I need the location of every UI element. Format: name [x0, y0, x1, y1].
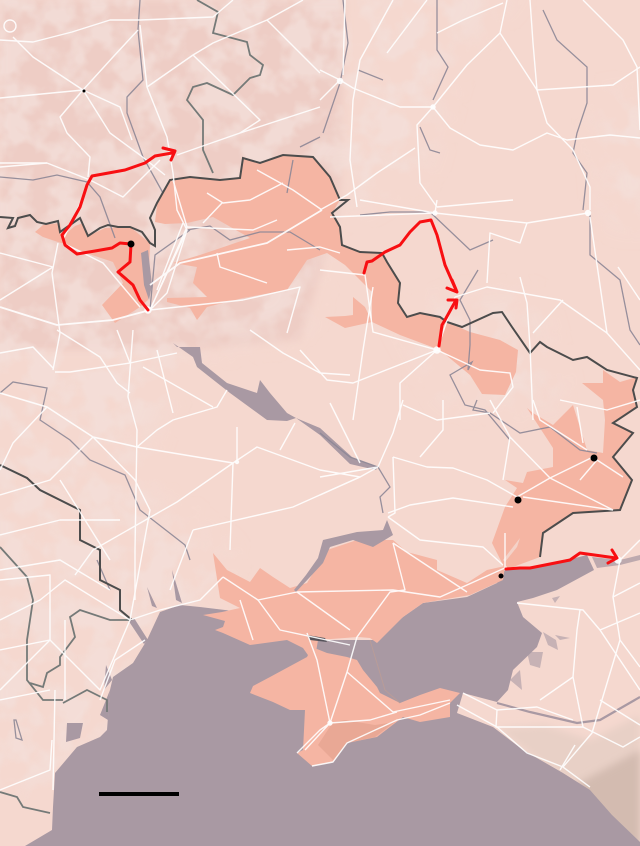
- route: Kharkiv to Belgorod: [439, 300, 457, 346]
- western estuaries: [66, 570, 182, 742]
- route: Kyiv from Belarus: [62, 148, 175, 310]
- occupied territory: Kyiv region: [35, 223, 150, 323]
- arrowhead: [163, 148, 175, 160]
- route: Sumy to Belgorod: [364, 220, 457, 292]
- occupied territory: Luhansk and Donetsk: [492, 370, 637, 570]
- Kakhovka reservoir and Dnipro: [294, 520, 393, 592]
- Kremenchuk reservoir: [160, 330, 296, 421]
- arrowhead: [608, 550, 617, 563]
- Black Sea and Sea of Azov: [25, 555, 640, 846]
- Kyiv reservoir: [141, 250, 152, 300]
- occupied territory: southern mainland: [203, 540, 505, 658]
- Crimean mountains: [318, 720, 395, 760]
- arrowhead: [448, 300, 457, 308]
- Arabat spit: [370, 640, 400, 703]
- unoccupied pocket in Donbas: [503, 538, 520, 562]
- Kuban lagoons: [510, 596, 570, 690]
- Dniester liman: [128, 618, 148, 644]
- occupied territory: Crimea: [250, 647, 460, 766]
- small city marker: [82, 90, 86, 92]
- Sivash dark strip: [307, 635, 327, 642]
- Kamianske reservoir: [296, 418, 378, 470]
- scale bar: [99, 792, 179, 796]
- darker north-west land tone: [0, 0, 345, 350]
- occupied territory: Kharkiv fringe: [325, 297, 372, 328]
- Kuban river: [497, 697, 640, 723]
- main national borders: [0, 155, 637, 620]
- Caucasus relief: [497, 715, 640, 846]
- route: Mariupol to Rostov: [506, 550, 617, 569]
- Don delta: [592, 555, 640, 568]
- Moldova borders: [0, 547, 63, 700]
- city markers: [128, 240, 598, 578]
- Belarus-Russia border: [0, 0, 263, 813]
- arrowhead: [447, 280, 457, 292]
- occupied territory: north-east: [155, 155, 518, 395]
